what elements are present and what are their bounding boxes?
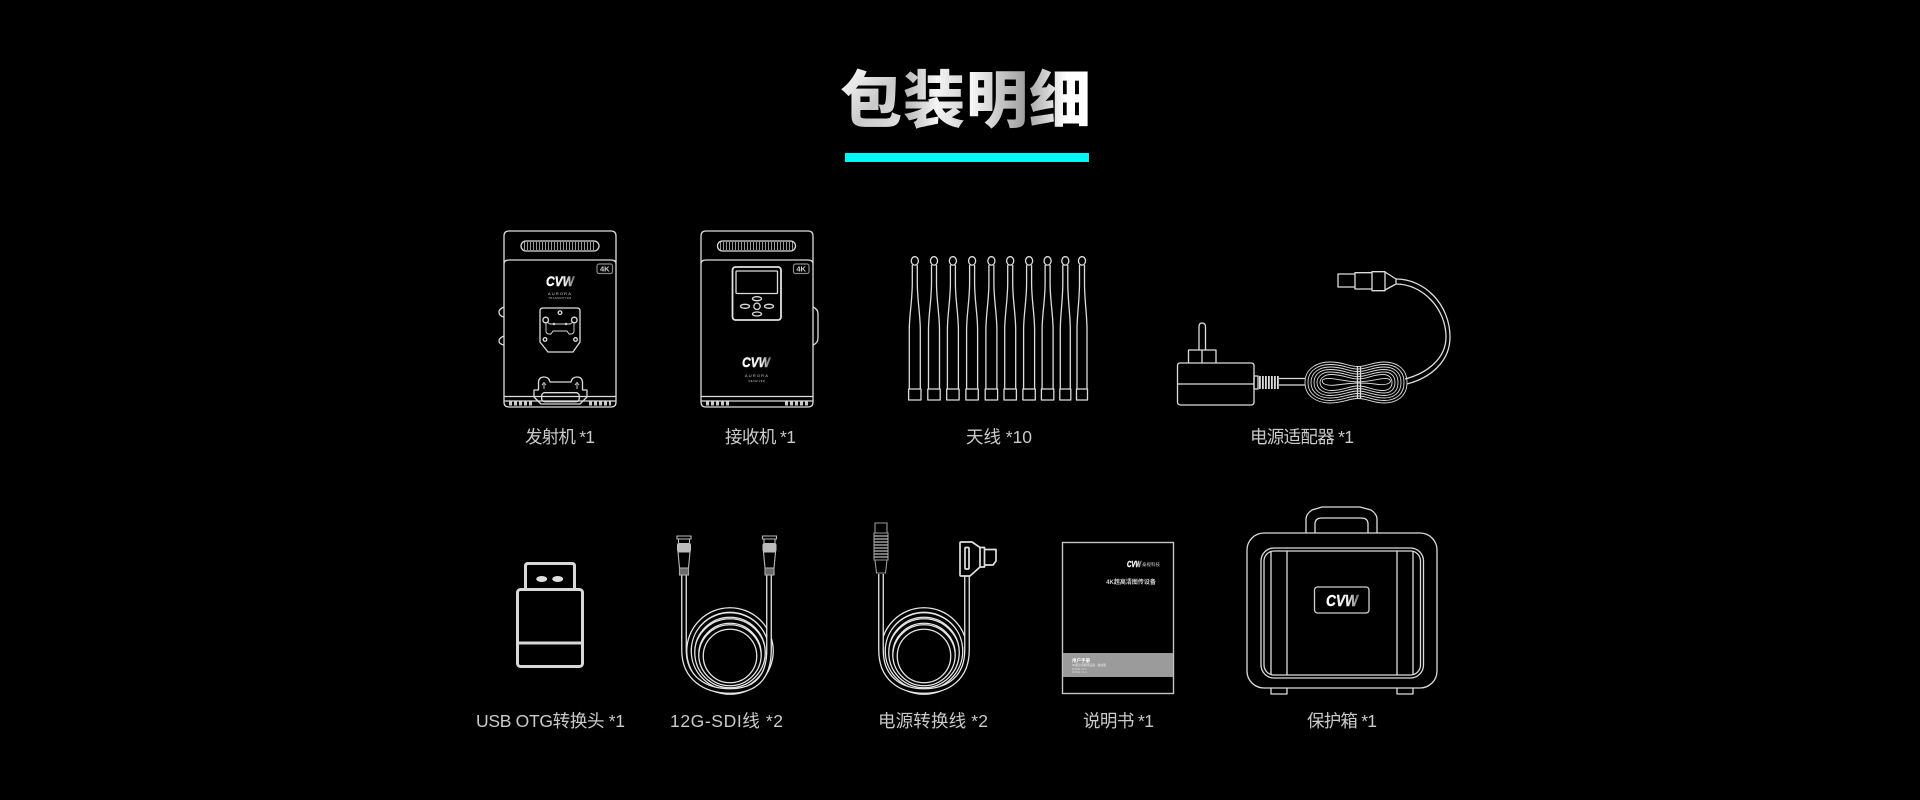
receiver control panel — [732, 267, 781, 320]
item: antennas — [909, 257, 1088, 400]
label: protective case: 保护箱 *1 — [1307, 711, 1377, 731]
title underline — [845, 153, 1089, 162]
transmitter bottom teeth — [509, 402, 611, 406]
adapter plug — [1188, 323, 1216, 363]
receiver logo: RECEIVER — [749, 380, 765, 383]
SDI left connector — [677, 536, 691, 575]
label: power conversion cable: 电源转换线 *2 — [878, 711, 988, 731]
receiver bottom teeth — [706, 402, 808, 406]
manual title: 4K超高清图传设备 — [1106, 578, 1156, 586]
Lemo connector — [874, 523, 888, 573]
SDI coil — [689, 610, 771, 692]
label: transmitter: 发射机 *1 — [525, 427, 595, 447]
transmitter 4K badge — [597, 264, 612, 274]
SDI cable legs — [684, 575, 769, 691]
title — [840, 67, 1091, 136]
manual logo: 泰视科技 — [1142, 561, 1160, 568]
transmitter body — [504, 231, 616, 407]
label: receiver: 接收机 *1 — [725, 427, 796, 447]
title: 装 — [903, 67, 965, 136]
label: USB OTG adapter: USB OTG转换头 *1 — [476, 711, 625, 731]
manual band — [1063, 653, 1173, 677]
transmitter logo: CVW — [546, 273, 576, 289]
title: 包 — [840, 67, 902, 136]
item: transmitter — [499, 231, 616, 407]
manual band text: MODEL V1.0 — [1072, 668, 1087, 671]
receiver body — [701, 231, 813, 407]
transmitter logo: TRANSMITTER — [548, 297, 572, 300]
case logo badge — [1314, 587, 1369, 613]
receiver logo: CVW — [742, 354, 772, 370]
transmitter 4K badge: 4K — [600, 265, 610, 274]
transmitter mount plate — [540, 308, 580, 352]
title: 明 — [966, 67, 1028, 136]
adapter DC connector — [1338, 272, 1396, 291]
case logo badge: CVW — [1326, 593, 1360, 610]
label: user manual: 说明书 *1 — [1083, 711, 1154, 731]
adapter strain relief — [1254, 376, 1279, 389]
transmitter logo — [546, 273, 576, 300]
item: protective case — [1247, 507, 1437, 694]
receiver side tab — [813, 307, 818, 345]
adapter cable — [1279, 279, 1450, 385]
receiver logo: AURORA — [745, 373, 769, 378]
adapter coil — [1305, 362, 1407, 403]
item: user manual — [1062, 542, 1174, 694]
adapter body — [1178, 363, 1254, 405]
transmitter bottom bracket — [534, 377, 587, 404]
D-tap connector — [960, 542, 996, 576]
receiver logo — [742, 354, 772, 383]
item: USB OTG adapter — [518, 564, 582, 666]
receiver 4K badge: 4K — [796, 265, 807, 274]
manual band text: 用户手册 — [1072, 657, 1090, 664]
receiver 4K badge — [794, 264, 809, 274]
manual band text — [1072, 657, 1106, 674]
case feet — [1271, 688, 1413, 694]
manual band text: MODEL V1.0 — [1072, 671, 1087, 674]
title: 细 — [1029, 67, 1091, 136]
manual cover — [1062, 542, 1174, 694]
receiver vent — [718, 241, 796, 251]
case handle — [1306, 507, 1377, 533]
item: receiver — [701, 231, 818, 407]
label: antennas: 天线 *10 — [966, 427, 1032, 447]
transmitter logo: AURORA — [548, 291, 572, 296]
transmitter side tabs — [499, 307, 504, 345]
label: 12G-SDI cable: 12G-SDI线 *2 — [670, 711, 783, 731]
item: 12G-SDI cable — [677, 536, 776, 692]
case straps — [1271, 551, 1413, 675]
item: power conversion cable — [874, 523, 996, 692]
manual band text: 4K超高清图传设备 · 发射器 — [1072, 663, 1106, 667]
item: power adapter — [1178, 272, 1450, 405]
manual logo: CVW — [1127, 560, 1142, 569]
case lid — [1261, 548, 1424, 678]
transmitter vent — [521, 241, 599, 251]
SDI right connector — [762, 536, 776, 575]
power cable coil — [883, 610, 965, 692]
case shell — [1247, 533, 1437, 688]
manual logo — [1127, 560, 1160, 569]
power cable legs — [881, 574, 967, 691]
label: power adapter: 电源适配器 *1 — [1250, 427, 1354, 447]
